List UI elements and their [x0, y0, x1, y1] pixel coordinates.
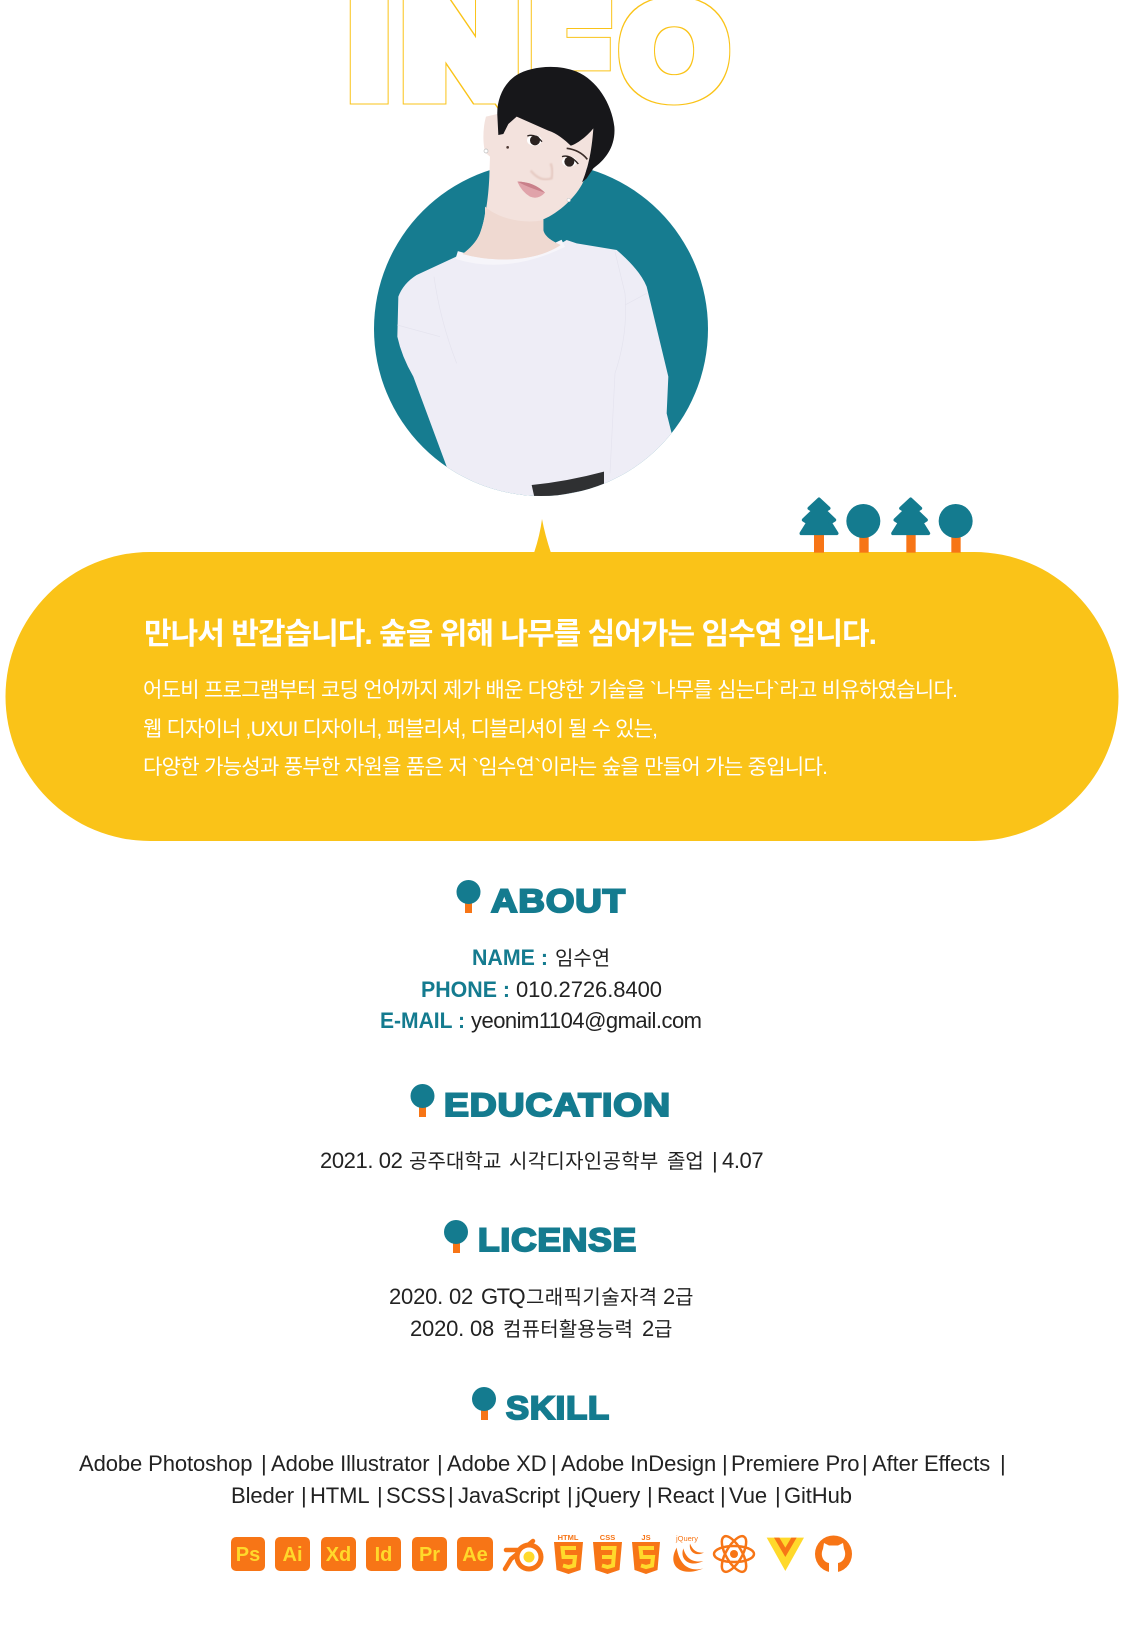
- icon: HTML5: HTML: [558, 1533, 579, 1542]
- skill list: |: [1000, 1451, 1006, 1476]
- email: E-MAIL :: [380, 1008, 465, 1033]
- icon: Photoshop: [231, 1537, 265, 1571]
- icon: InDesign: Id: [375, 1544, 392, 1566]
- icon: XD: Xd: [326, 1544, 351, 1566]
- skill list: [79, 1451, 1006, 1508]
- skill list: |: [261, 1451, 273, 1476]
- name: [472, 945, 610, 970]
- skill list: |: [551, 1451, 563, 1476]
- icon: Illustrator: Ai: [282, 1544, 302, 1566]
- icon: Photoshop: Ps: [236, 1544, 260, 1566]
- icon: After Effects: [457, 1537, 493, 1571]
- face and neck: [463, 113, 593, 259]
- hair: [497, 67, 614, 182]
- bubble body text: 웹 디자이너 ,UXUI 디자이너, 퍼블리셔, 디블리셔이 될 수 있는,: [143, 718, 658, 741]
- icon: row of four trees: [801, 499, 973, 553]
- license entries: 급: [675, 1287, 693, 1309]
- license entries: 2: [663, 1284, 675, 1309]
- section: license: [389, 1220, 693, 1341]
- bubble heading: 만나서 반갑습니다. 숲을 위해 나무를 심어가는 임수연 입니다.: [144, 618, 877, 651]
- license entries: [389, 1284, 693, 1341]
- education entry: 졸업: [667, 1150, 709, 1173]
- skill list: SCSS: [386, 1483, 452, 1508]
- skill list: JavaScript: [458, 1483, 566, 1508]
- skill list: Vue: [729, 1483, 773, 1508]
- skill list: HTML: [310, 1483, 375, 1508]
- skill list: Adobe InDesign: [561, 1451, 722, 1476]
- icon: JavaScript: [632, 1533, 660, 1574]
- skill list: |: [775, 1483, 787, 1508]
- icon row: software logos: [231, 1533, 852, 1575]
- icon: tree: [410, 1084, 434, 1117]
- license entries: 2020. 02: [389, 1284, 479, 1309]
- icon: tree: [472, 1387, 496, 1420]
- education entry: 시각디자인공학부: [509, 1150, 664, 1173]
- skill list: |: [720, 1483, 732, 1508]
- section: education: [320, 1084, 763, 1173]
- bubble shape: [6, 519, 1119, 841]
- skill list: Premiere Pro: [731, 1451, 865, 1476]
- skill list: |: [437, 1451, 449, 1476]
- icon: React: [714, 1533, 754, 1575]
- phone: 010.2726.8400: [516, 977, 662, 1002]
- skill list: |: [448, 1483, 460, 1508]
- nose and lips: [517, 163, 552, 198]
- skill list: Bleder: [231, 1483, 300, 1508]
- education entry: |: [712, 1148, 723, 1173]
- icon: InDesign: [366, 1537, 401, 1571]
- icon: GitHub: [815, 1536, 852, 1572]
- icon: CSS3: [593, 1533, 622, 1574]
- heading: education: EDUCATION: [444, 1087, 671, 1123]
- icon: HTML5: [554, 1533, 583, 1574]
- icon: jQuery: jQuery: [675, 1534, 698, 1543]
- skill list: React: [657, 1483, 720, 1508]
- heading: about: ABOUT: [491, 883, 626, 919]
- icon: XD: [321, 1537, 356, 1571]
- skill list: Adobe Photoshop: [79, 1451, 258, 1476]
- license entries: 급: [654, 1319, 672, 1341]
- skill list: |: [377, 1483, 389, 1508]
- education entry: 공주대학교: [409, 1150, 507, 1173]
- license entries: 2: [642, 1316, 654, 1341]
- portrait: person on teal circle: [374, 67, 708, 500]
- icon: Vue: [767, 1538, 804, 1571]
- bubble body text: 다양한 가능성과 풍부한 자원을 품은 저 `임수연`이라는 숲을 만들어 가는 중입니다.: [143, 756, 828, 779]
- panel: yellow speech bubble: [6, 519, 1119, 841]
- skill list: |: [862, 1451, 874, 1476]
- skill list: |: [567, 1483, 579, 1508]
- license entries: 2020. 08: [410, 1316, 500, 1341]
- section: skill: [79, 1387, 1006, 1508]
- skill list: |: [647, 1483, 659, 1508]
- icon: jQuery: [673, 1534, 704, 1572]
- icon: JavaScript: JS: [641, 1533, 651, 1542]
- icon: Premiere: Pr: [419, 1544, 440, 1566]
- skill list: Adobe Illustrator: [271, 1451, 436, 1476]
- bubble body text: [143, 679, 958, 779]
- skill list: GitHub: [784, 1483, 852, 1508]
- skill list: After Effects: [872, 1451, 996, 1476]
- name: NAME :: [472, 945, 548, 970]
- eyes: [527, 135, 578, 167]
- icon: tree: [444, 1220, 468, 1253]
- education entry: 2021. 02: [320, 1148, 408, 1173]
- license entries: GTQ: [481, 1284, 526, 1309]
- bubble body text: 어도비 프로그램부터 코딩 언어까지 제가 배운 다양한 기술을 `나무를 심는다`라고 비유하였습니다.: [143, 679, 958, 702]
- skill list: Adobe XD: [447, 1451, 553, 1476]
- icon: CSS3: CSS: [600, 1533, 615, 1542]
- education entry: 4.07: [722, 1148, 763, 1173]
- icon: Premiere: [412, 1537, 447, 1571]
- icon: Blender: [505, 1541, 544, 1572]
- phone: [421, 977, 662, 1002]
- name: 임수연: [555, 947, 610, 970]
- license entries: 컴퓨터활용능력: [503, 1318, 639, 1341]
- skill list: |: [301, 1483, 313, 1508]
- email: yeonim1104@gmail.com: [471, 1008, 702, 1033]
- skill list: jQuery: [575, 1483, 646, 1508]
- icon: After Effects: Ae: [462, 1544, 488, 1566]
- heading: skill: SKILL: [506, 1390, 610, 1426]
- phone: PHONE :: [421, 977, 510, 1002]
- skill list: |: [722, 1451, 734, 1476]
- title: INFO outlined: [351, 0, 728, 124]
- section: about: [380, 880, 702, 1033]
- icon: tree: [456, 880, 480, 913]
- license entries: 그래픽기술자격: [526, 1286, 664, 1309]
- icon: Illustrator: [275, 1537, 310, 1571]
- heading: license: LICENSE: [478, 1222, 637, 1258]
